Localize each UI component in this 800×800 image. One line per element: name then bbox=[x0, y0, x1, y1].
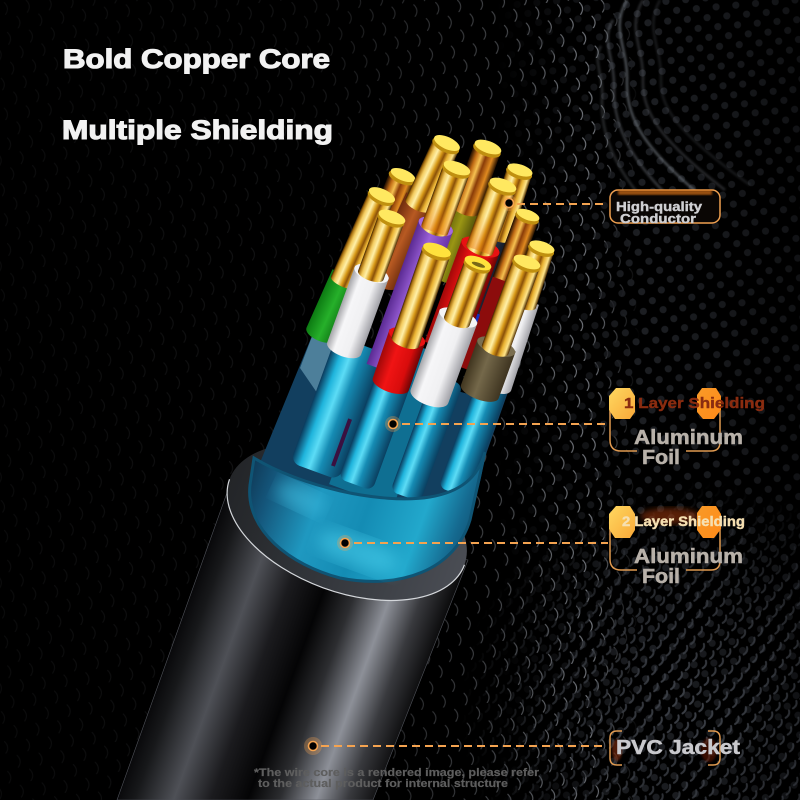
bracket frame bbox=[610, 518, 720, 570]
aluminum foil inner conductors bbox=[290, 334, 508, 507]
title: Bold Copper Core: Bold Copper Core bbox=[63, 44, 330, 74]
marker dot and leader line bbox=[501, 195, 606, 211]
callout: High-quality Conductor bbox=[501, 190, 720, 226]
wire 1: left white bbox=[324, 205, 411, 362]
text: Aluminum Foil: Aluminum bbox=[634, 546, 743, 568]
heading: 1 Layer Shielding: 1 Layer Shielding bbox=[624, 395, 765, 412]
title: Multiple Shielding: Multiple Shielding bbox=[62, 115, 333, 145]
callout: PVC Jacket bbox=[304, 731, 740, 765]
wire 12: rear with red sleeve bbox=[456, 205, 541, 375]
wire 8: orange bbox=[365, 131, 464, 294]
callout: 2 Layer Shielding bbox=[337, 506, 745, 588]
jacket end cap bbox=[206, 413, 488, 631]
wire 5: center red bbox=[425, 173, 524, 355]
text: Aluminum Foil: Foil bbox=[642, 566, 680, 588]
marker dot and leader line bbox=[304, 737, 602, 755]
wire 2: front red bbox=[370, 238, 457, 398]
wire 13: rear white bbox=[480, 237, 558, 397]
wire 7: green bbox=[304, 183, 398, 346]
text: PVC Jacket: PVC Jacket bbox=[616, 737, 740, 759]
text: Aluminum Foil bbox=[634, 546, 743, 588]
wire 10: olive bbox=[426, 136, 504, 285]
wire 4: brown bbox=[458, 250, 548, 406]
bracket frame bbox=[610, 400, 720, 451]
wire 6: purple bbox=[367, 156, 476, 376]
marker dot and leader line bbox=[385, 416, 608, 432]
callout: 1 Layer Shielding bbox=[385, 388, 765, 469]
bracket frame bbox=[610, 731, 720, 765]
label box: Conductor bbox=[620, 211, 696, 226]
text: Aluminum Foil: Aluminum bbox=[634, 427, 743, 449]
wire 11: navy bbox=[453, 160, 536, 338]
footnote: to the actual product for internal structure bbox=[258, 778, 508, 790]
cable illustration bbox=[117, 131, 558, 800]
text: Aluminum Foil bbox=[634, 427, 743, 469]
footnote: *The wire core is a rendered image, please refer bbox=[254, 767, 540, 779]
text: Aluminum Foil: Foil bbox=[642, 447, 680, 469]
marker dot and leader line bbox=[337, 535, 608, 551]
highlight blobs bbox=[609, 388, 721, 419]
aluminum foil band bbox=[250, 452, 485, 581]
inner clear sleeve bbox=[250, 326, 508, 582]
wire 9: rear copper bbox=[368, 165, 418, 236]
wire 3: middle white bbox=[408, 251, 499, 412]
label box: High-quality bbox=[616, 199, 703, 214]
highlight blobs bbox=[609, 506, 721, 538]
PVC jacket bbox=[117, 490, 468, 800]
heading: 2 Layer Shielding: 2 Layer Shielding bbox=[622, 514, 745, 529]
label box bbox=[610, 190, 720, 226]
footnote bbox=[254, 767, 540, 790]
